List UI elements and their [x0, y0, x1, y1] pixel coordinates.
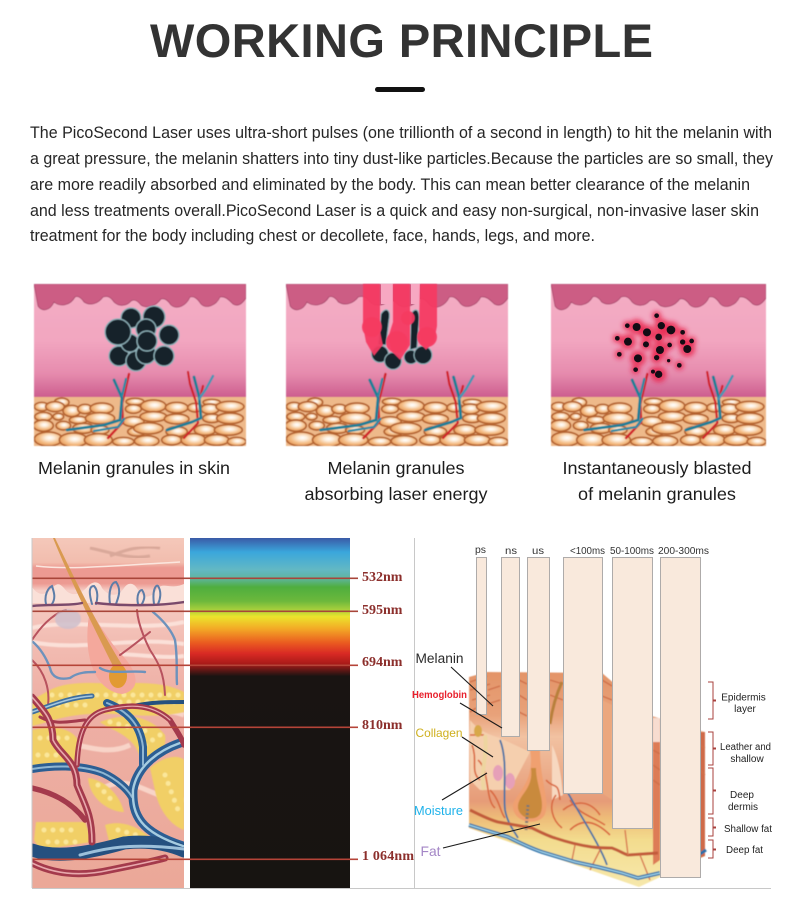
component labels: Hemoglobin	[412, 690, 467, 701]
pulse duration labels: us	[532, 546, 544, 557]
pulse duration labels: ps	[475, 545, 486, 556]
component labels: Fat	[420, 843, 441, 859]
layer labels: dermis	[728, 802, 758, 813]
wavelength line 694nm: 694nm	[362, 655, 403, 670]
pulse duration labels: 200-300ms	[658, 546, 709, 557]
pale dermis highlights	[470, 720, 530, 790]
pulse duration labels: ns	[505, 546, 517, 557]
pulse bars	[476, 558, 700, 878]
intro paragraph: are more readily absorbed and eliminated by the body. This can mean better clearance of the melanin	[30, 176, 750, 194]
component labels: Melanin	[416, 651, 464, 666]
layer brackets	[708, 682, 716, 858]
dermal waves	[32, 582, 184, 603]
panel: wavelength penetration	[32, 538, 414, 888]
pulse duration labels: <100ms	[570, 546, 605, 557]
collagen bundles	[470, 735, 610, 835]
layer labels: Shallow fat	[724, 824, 772, 835]
blue vessels	[32, 696, 184, 855]
tissue illustration 1	[33, 284, 246, 447]
title: WORKING PRINCIPLE	[150, 14, 653, 67]
panel: blasted melanin granules	[550, 284, 766, 504]
layer labels: Deep fat	[726, 845, 763, 856]
pulse duration labels	[475, 545, 709, 557]
skin cross-section	[32, 538, 184, 888]
fat lobules	[32, 683, 184, 850]
glands	[493, 765, 503, 781]
wavelength line 1064nm: 1 064nm	[362, 849, 414, 864]
layer labels: Epidermis	[721, 692, 766, 704]
pointer arrows	[442, 667, 540, 848]
caption: Melanin granules	[328, 458, 465, 478]
intro paragraph: a great pressure, the melanin shatters into tiny dust-like particles.Because the particles are so small, they	[30, 150, 774, 168]
tissue illustration 2	[285, 284, 508, 447]
intro paragraph: The PicoSecond Laser uses ultra-short pulses (one trillionth of a second in length) to hit the melanin with	[30, 124, 772, 142]
intro paragraph	[30, 124, 774, 245]
skin block	[469, 672, 706, 887]
panel: melanin granules in skin	[33, 284, 246, 478]
frame lines	[32, 538, 771, 888]
dermis vessels	[500, 740, 607, 865]
hair	[87, 610, 136, 694]
wavelength line 532nm: 532nm	[362, 570, 403, 585]
layer labels	[720, 692, 772, 856]
panel: pulse duration chart	[412, 545, 772, 887]
panel: absorbing laser energy: absorbing laser energy	[304, 484, 488, 504]
wavelength line 595nm: 595nm	[362, 603, 403, 618]
tissue illustration 3	[550, 284, 766, 447]
laser beams	[362, 284, 437, 360]
layer labels: layer	[734, 704, 757, 715]
component labels	[412, 651, 467, 859]
spectrum bar	[190, 538, 350, 888]
melanin cluster under laser	[372, 310, 432, 370]
pulse duration labels: 50-100ms	[610, 546, 654, 557]
caption: Melanin granules in skin	[38, 458, 230, 478]
follicle	[513, 750, 546, 822]
red vessels	[32, 697, 184, 874]
title underline	[375, 87, 425, 92]
upper capillaries	[32, 582, 184, 705]
layer labels: Deep	[730, 790, 754, 801]
layer labels: shallow	[730, 754, 764, 765]
caption: Instantaneously blasted	[562, 458, 752, 478]
blasted particles glow	[613, 311, 696, 382]
component labels: Moisture	[414, 804, 463, 818]
intro paragraph: treatment for the body including chest or decollete, face, hands, legs, and more.	[30, 227, 595, 245]
component labels: Collagen	[416, 726, 462, 740]
fat vessel	[469, 825, 660, 878]
panel: absorbing laser energy	[285, 284, 508, 504]
faint beam gaps	[381, 284, 420, 304]
epidermis strokes	[470, 676, 705, 785]
melanin cluster	[105, 306, 179, 371]
panel: blasted melanin granules: of melanin granules	[578, 484, 736, 504]
layer labels: Leather and	[720, 742, 771, 753]
blasted particles	[615, 313, 694, 378]
intro paragraph: and less treatments overall.PicoSecond Laser is a quick and easy non-surgical, non-invasive laser skin	[30, 202, 759, 220]
wavelength line 810nm: 810nm	[362, 718, 403, 733]
